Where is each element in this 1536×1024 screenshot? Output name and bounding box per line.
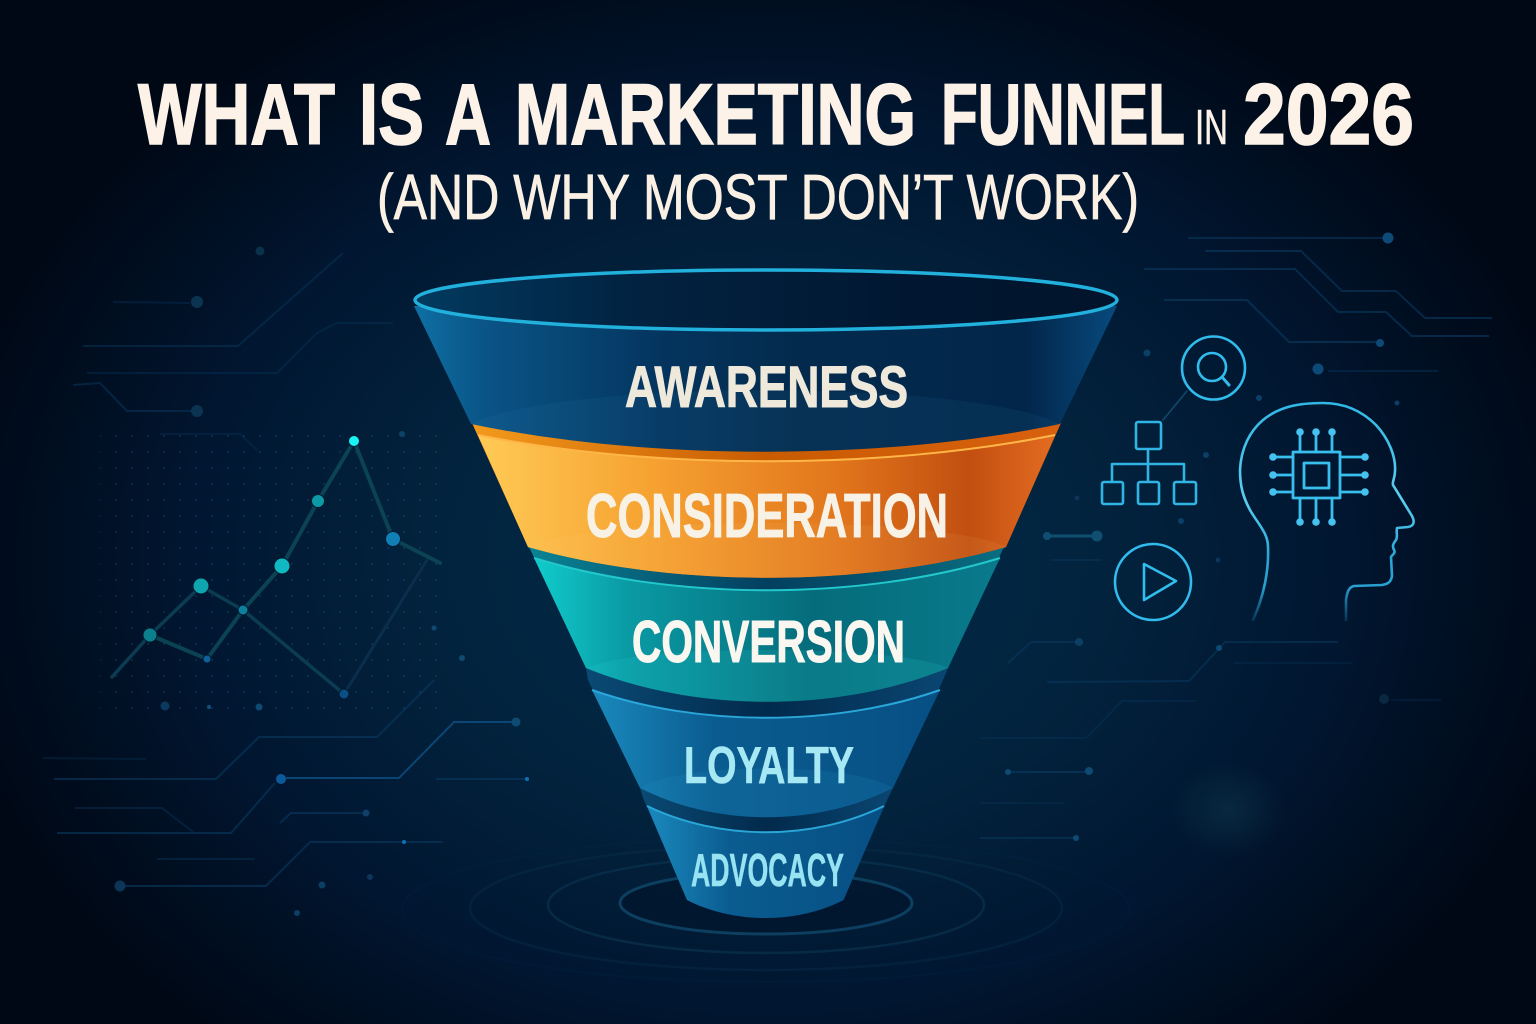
label: loyalty: LOYALTY [684,737,854,795]
funnel band: consideration [472,423,1061,578]
title: IN [1195,101,1228,155]
background circuit traces: right [980,232,1492,841]
background dot grid [100,432,450,717]
chart points [143,436,400,699]
icon: org chart [1102,422,1196,504]
funnel rim [415,270,1117,330]
funnel band: loyalty [586,668,948,817]
title: 2026 [1243,67,1414,163]
title: FUNNEL [941,67,1185,163]
funnel band: advocacy [640,788,893,918]
label: consideration: CONSIDERATION [586,482,948,551]
label: conversion: CONVERSION [632,609,905,675]
background circuit traces: left [43,246,529,916]
icon: head with chip [1240,403,1414,620]
title: WHAT [138,67,335,163]
icon: search [1163,336,1245,420]
chip [1269,428,1369,526]
funnel band: conversion [528,547,1006,702]
funnel band: awareness [414,270,1117,452]
subtitle: (AND WHY MOST DON’T WORK) [377,161,1139,233]
ground rings below funnel [402,838,1130,982]
line chart [112,436,440,699]
label: awareness: AWARENESS [625,355,908,420]
background glow spot [1170,762,1286,858]
title: MARKETING [515,67,916,163]
title: A [445,67,491,163]
icon: play [1115,544,1191,620]
label: advocacy: ADVOCACY [691,844,844,896]
title [138,67,1414,163]
title: IS [359,67,424,163]
funnel [414,270,1117,918]
